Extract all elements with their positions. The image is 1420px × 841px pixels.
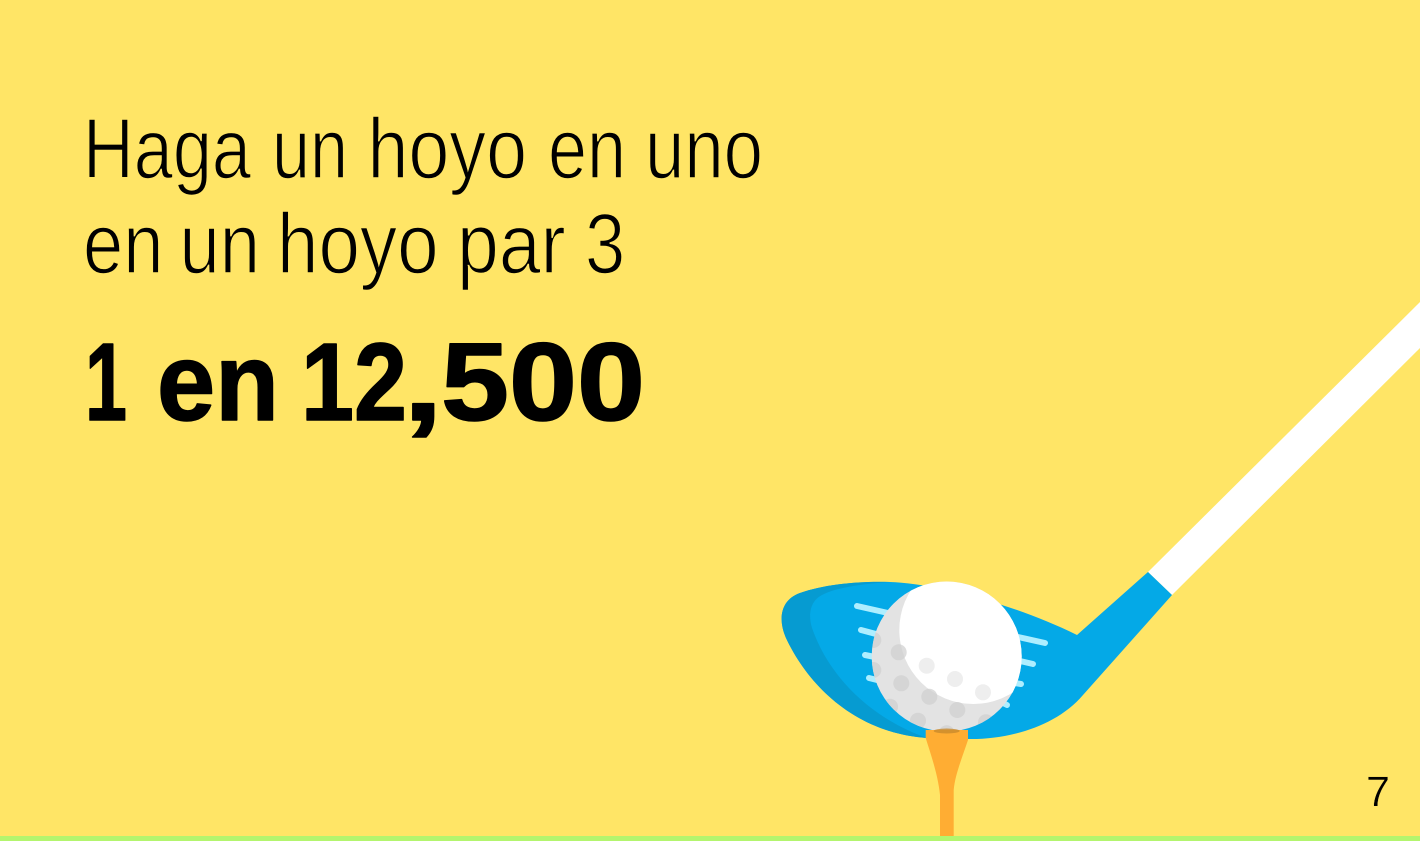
club shaft (1148, 302, 1420, 595)
tee (926, 728, 968, 836)
heading: hole in one: hoyo (368, 102, 527, 197)
heading: hole in one: hoyo (277, 197, 439, 292)
heading: hole in one: un (272, 102, 348, 197)
speed lines (857, 606, 1045, 705)
ground strip (0, 836, 1420, 841)
odds figure: en (157, 321, 279, 444)
odds figure: 500 (441, 321, 645, 444)
odds figure (85, 321, 645, 444)
odds figure: , (403, 321, 443, 444)
odds figure: 12 (301, 321, 407, 444)
heading: hole in one: en (548, 102, 626, 197)
illustration: golf club, ball and tee (782, 302, 1420, 836)
club head (782, 572, 1172, 739)
club head shaded edge (782, 582, 927, 738)
page number: 7 (1366, 768, 1390, 816)
heading: hole in one (83, 102, 763, 292)
heading: hole in one: en (83, 197, 163, 292)
heading: hole in one: un (180, 197, 260, 292)
odds figure: 1 (85, 321, 127, 444)
heading: hole in one: par (457, 197, 566, 292)
heading: hole in one: Haga (83, 102, 252, 197)
heading: hole in one: uno (645, 102, 763, 197)
golf ball (872, 582, 1022, 730)
heading: hole in one: 3 (585, 197, 625, 292)
